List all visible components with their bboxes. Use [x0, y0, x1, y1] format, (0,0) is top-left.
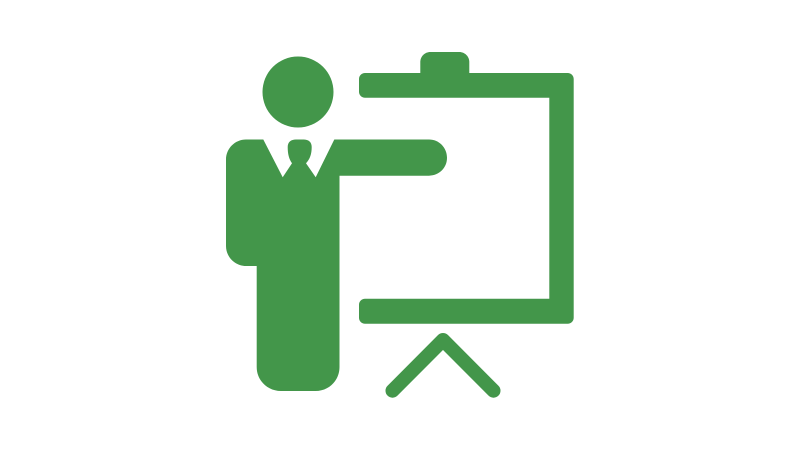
presenter body with pointing arm — [226, 140, 447, 391]
board stand legs — [392, 340, 494, 391]
presenter head — [262, 56, 334, 128]
board frame — [359, 73, 574, 324]
board clip — [420, 52, 469, 75]
icon: presentation board — [359, 52, 574, 324]
icon: presenter figure — [226, 56, 447, 391]
